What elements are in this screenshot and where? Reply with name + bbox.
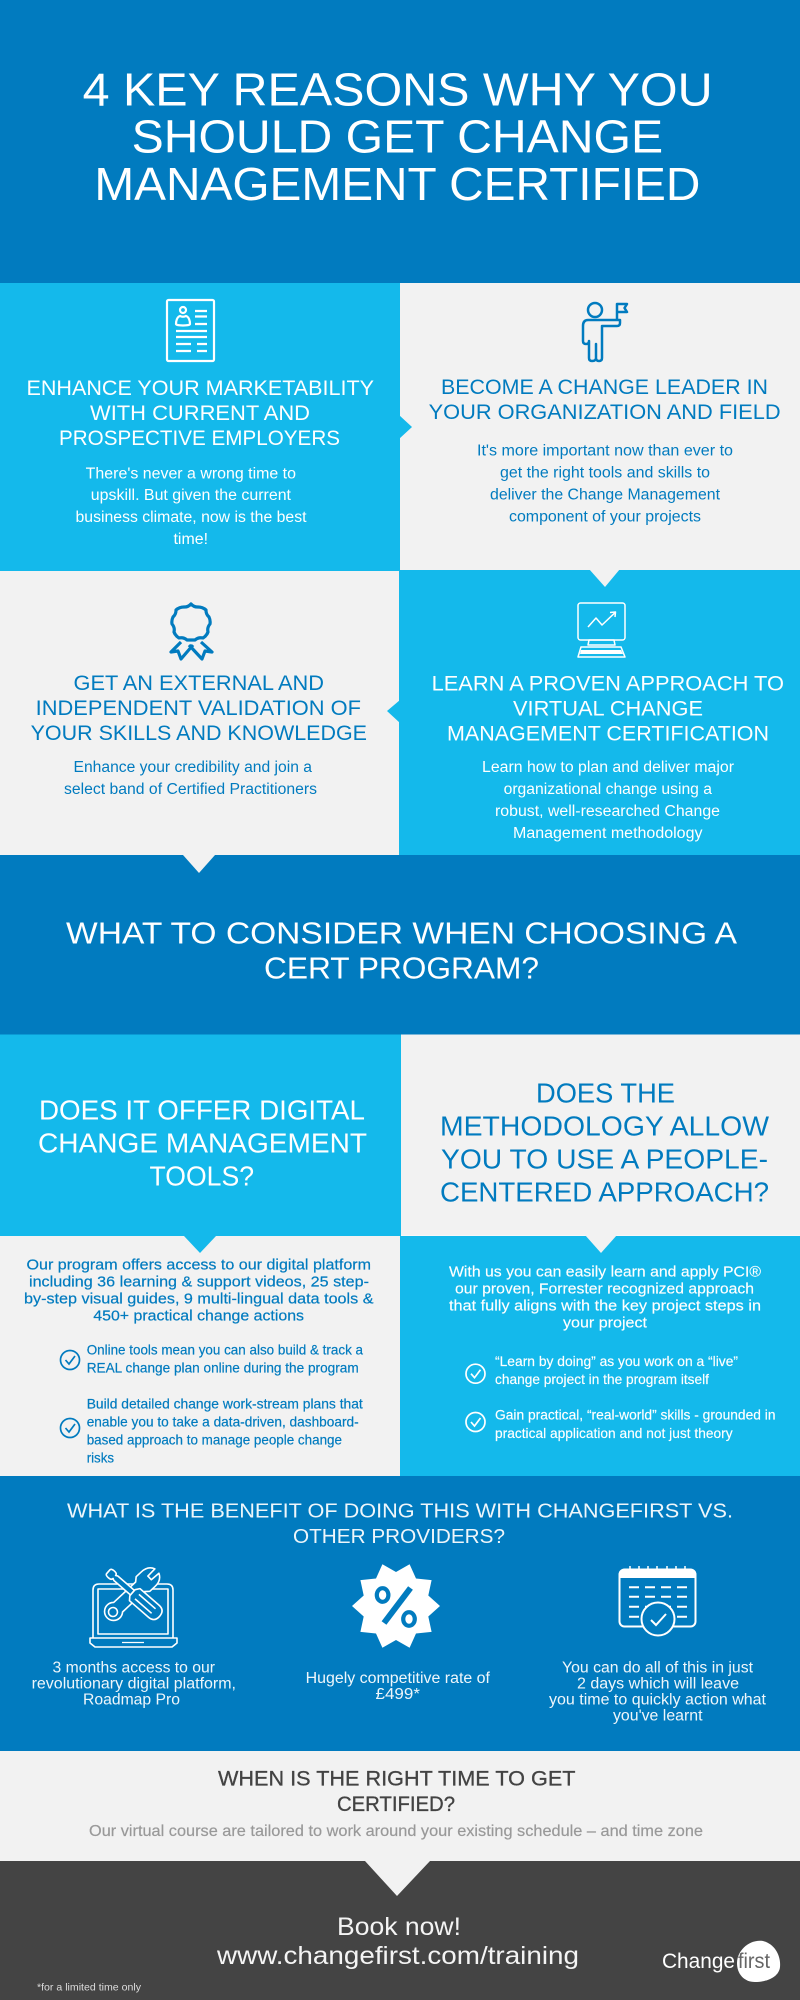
text: proven approach body: Learn how to plan and deliver major xyxy=(482,759,734,776)
heading: external validation: GET AN EXTERNAL AND xyxy=(74,672,324,695)
text: digital tools intro: including 36 learning & support videos, 25 step- xyxy=(29,1274,369,1291)
panel: reason 4 proven approach xyxy=(387,569,800,856)
heading: digital tools question: CHANGE MANAGEMENT xyxy=(38,1128,367,1159)
panel: what to consider banner xyxy=(0,855,800,1035)
bullet: online tools: Online tools mean you can also build & track a xyxy=(87,1342,363,1358)
bullet: work-stream plans: Build detailed change work-stream plans that xyxy=(87,1396,363,1412)
icon: computer with chart xyxy=(578,603,625,657)
heading: external validation xyxy=(31,672,367,745)
arrow: reason 3 to banner xyxy=(183,855,215,873)
logo: Changefirst xyxy=(662,1941,780,1982)
heading: proven approach xyxy=(432,673,784,746)
heading: proven approach: MANAGEMENT CERTIFICATION xyxy=(447,723,769,746)
panel: people-centered answer xyxy=(400,1235,800,1476)
text: digital tools intro: Our program offers access to our digital platform xyxy=(26,1256,371,1273)
bullet: work-stream plans: enable you to take a data-driven, dashboard- xyxy=(87,1414,359,1430)
heading: marketability: PROSPECTIVE EMPLOYERS xyxy=(59,427,340,450)
text: proven approach body: robust, well-researched Change xyxy=(495,803,720,820)
heading: marketability: WITH CURRENT AND xyxy=(90,402,310,425)
bullet: online tools: REAL change plan online during the program xyxy=(87,1360,359,1376)
text: people-centered intro: your project xyxy=(563,1315,648,1332)
text: marketability body: business climate, now is the best xyxy=(76,509,307,526)
icon: rosette ribbon xyxy=(171,604,212,659)
panel: digital tools answer xyxy=(0,1236,400,1476)
heading: people-centered question: CENTERED APPROACH? xyxy=(440,1177,769,1208)
text: two days: you time to quickly action what xyxy=(549,1692,767,1709)
text: right time body: Our virtual course are tailored to work around your existing schedule – and time zone xyxy=(89,1823,703,1840)
text: two days: You can do all of this in just xyxy=(562,1660,754,1677)
heading: change leader: BECOME A CHANGE LEADER IN xyxy=(441,376,768,399)
icon: resume document xyxy=(167,300,214,361)
text: platform access xyxy=(32,1660,236,1709)
bullet: work-stream plans: risks xyxy=(87,1450,114,1466)
text: external validation body: select band of Certified Practitioners xyxy=(64,781,317,798)
heading: benefits xyxy=(67,1500,733,1548)
text: external validation body: Enhance your credibility and join a xyxy=(74,759,312,776)
text: people-centered intro: With us you can easily learn and apply PCI® xyxy=(449,1264,761,1281)
arrow: reason 2 to reason 4 xyxy=(589,569,620,587)
text: platform access: Roadmap Pro xyxy=(83,1692,180,1709)
text: digital tools intro xyxy=(24,1256,374,1325)
text: change leader body: deliver the Change Management xyxy=(490,486,721,503)
text: marketability body xyxy=(76,465,307,548)
heading: right time: WHEN IS THE RIGHT TIME TO GET xyxy=(218,1768,576,1791)
call to action: Book now! xyxy=(337,1913,461,1941)
icon: percent badge xyxy=(352,1564,440,1648)
heading: change leader xyxy=(429,376,781,424)
icon: leader with flag xyxy=(583,303,627,361)
bullet: practical skills xyxy=(466,1406,776,1441)
text: proven approach body xyxy=(482,759,734,842)
icon: laptop with tools xyxy=(90,1564,177,1647)
title: 4 KEY REASONS WHY YOU xyxy=(83,64,713,116)
call to action: www.changefirst.com/training xyxy=(216,1942,579,1970)
heading: marketability: ENHANCE YOUR MARKETABILITY xyxy=(26,377,374,400)
bullet: learn by doing xyxy=(466,1353,738,1387)
heading: what to consider: WHAT TO CONSIDER WHEN CHOOSING A xyxy=(66,915,737,950)
panel: benefits xyxy=(0,1476,800,1751)
heading: people-centered question: DOES THE xyxy=(536,1078,675,1109)
heading: digital tools question: DOES IT OFFER DIGITAL xyxy=(39,1094,365,1125)
bullet: work-stream plans xyxy=(60,1396,363,1466)
heading: people-centered question xyxy=(440,1078,770,1208)
bullet: learn by doing: “Learn by doing” as you work on a “live” xyxy=(495,1353,738,1369)
text: proven approach body: Management methodology xyxy=(513,825,703,842)
arrow: people-centered down xyxy=(585,1235,617,1253)
text: competitive rate: £499* xyxy=(376,1686,420,1703)
bullet: online tools xyxy=(60,1342,363,1376)
footnote: *for a limited time only xyxy=(37,1982,142,1994)
panel: right time xyxy=(0,1751,800,1861)
text: marketability body: upskill. But given the current xyxy=(91,487,292,504)
text: platform access: 3 months access to our xyxy=(52,1660,215,1677)
heading: digital tools question xyxy=(38,1094,367,1192)
text: change leader body xyxy=(477,442,733,525)
text: external validation body xyxy=(64,759,317,798)
text: change leader body: component of your projects xyxy=(509,508,701,525)
arrow: reason 1 to reason 2 xyxy=(399,415,412,439)
heading: benefits: OTHER PROVIDERS? xyxy=(293,1525,505,1548)
title: SHOULD GET CHANGE xyxy=(132,111,663,163)
bullet: learn by doing: change project in the program itself xyxy=(495,1371,709,1387)
heading: proven approach: LEARN A PROVEN APPROACH TO xyxy=(432,673,784,696)
bullet: work-stream plans: based approach to manage people change xyxy=(87,1432,342,1448)
arrow: reason 4 to reason 3 xyxy=(387,700,400,723)
text: two days xyxy=(549,1660,767,1725)
arrow: right time to footer xyxy=(365,1861,430,1896)
call to action xyxy=(216,1913,579,1970)
panel: people-centered question xyxy=(401,1034,800,1236)
panel: reason 2 change leader xyxy=(399,283,800,571)
heading: right time: CERTIFIED? xyxy=(337,1793,455,1816)
text: two days: 2 days which will leave xyxy=(577,1676,739,1693)
panel: digital tools question xyxy=(0,1034,401,1236)
text: people-centered intro xyxy=(449,1264,761,1332)
text: competitive rate xyxy=(306,1670,491,1703)
heading: what to consider xyxy=(66,915,737,985)
icon: calendar with check xyxy=(620,1566,696,1636)
heading: benefits: WHAT IS THE BENEFIT OF DOING THIS WITH CHANGEFIRST VS. xyxy=(67,1500,733,1523)
heading: proven approach: VIRTUAL CHANGE xyxy=(513,698,703,721)
panel: footer xyxy=(0,1861,800,2000)
text: platform access: revolutionary digital platform, xyxy=(32,1676,236,1693)
heading: external validation: INDEPENDENT VALIDATION OF xyxy=(36,697,361,720)
text: digital tools intro: by-step visual guides, 9 multi-lingual data tools & xyxy=(24,1290,374,1307)
text: competitive rate: Hugely competitive rate of xyxy=(306,1670,491,1687)
heading: what to consider: CERT PROGRAM? xyxy=(264,950,539,985)
heading: digital tools question: TOOLS? xyxy=(150,1161,254,1192)
bullet: practical skills: practical application and not just theory xyxy=(495,1425,733,1441)
text: people-centered intro: that fully aligns with the key project steps in xyxy=(449,1298,761,1315)
logo: Changefirst: Change xyxy=(662,1950,735,1973)
text: two days: you've learnt xyxy=(613,1708,703,1725)
bullet: practical skills: Gain practical, “real-world” skills - grounded in xyxy=(495,1406,776,1422)
title xyxy=(83,64,713,210)
arrow: digital tools down xyxy=(184,1236,216,1253)
heading: change leader: YOUR ORGANIZATION AND FIELD xyxy=(429,401,781,424)
heading: people-centered question: YOU TO USE A PEOPLE- xyxy=(441,1144,768,1175)
text: people-centered intro: our proven, Forrester recognized approach xyxy=(455,1281,754,1298)
logo: Changefirst: first xyxy=(738,1950,770,1973)
panel: reason 1 marketability xyxy=(0,283,400,571)
panel: header xyxy=(0,0,800,284)
heading: marketability xyxy=(26,377,374,450)
heading: external validation: YOUR SKILLS AND KNOWLEDGE xyxy=(31,722,367,745)
panel: reason 3 external validation xyxy=(0,571,399,856)
text: change leader body: It's more important now than ever to xyxy=(477,442,733,459)
text: marketability body: There's never a wrong time to xyxy=(86,465,296,482)
heading: right time xyxy=(218,1768,576,1816)
text: proven approach body: organizational change using a xyxy=(504,781,712,798)
title: MANAGEMENT CERTIFIED xyxy=(94,158,700,210)
heading: people-centered question: METHODOLOGY ALLOW xyxy=(440,1111,770,1142)
text: digital tools intro: 450+ practical change actions xyxy=(93,1308,304,1325)
text: marketability body: time! xyxy=(174,531,208,548)
text: change leader body: get the right tools and skills to xyxy=(500,464,710,481)
